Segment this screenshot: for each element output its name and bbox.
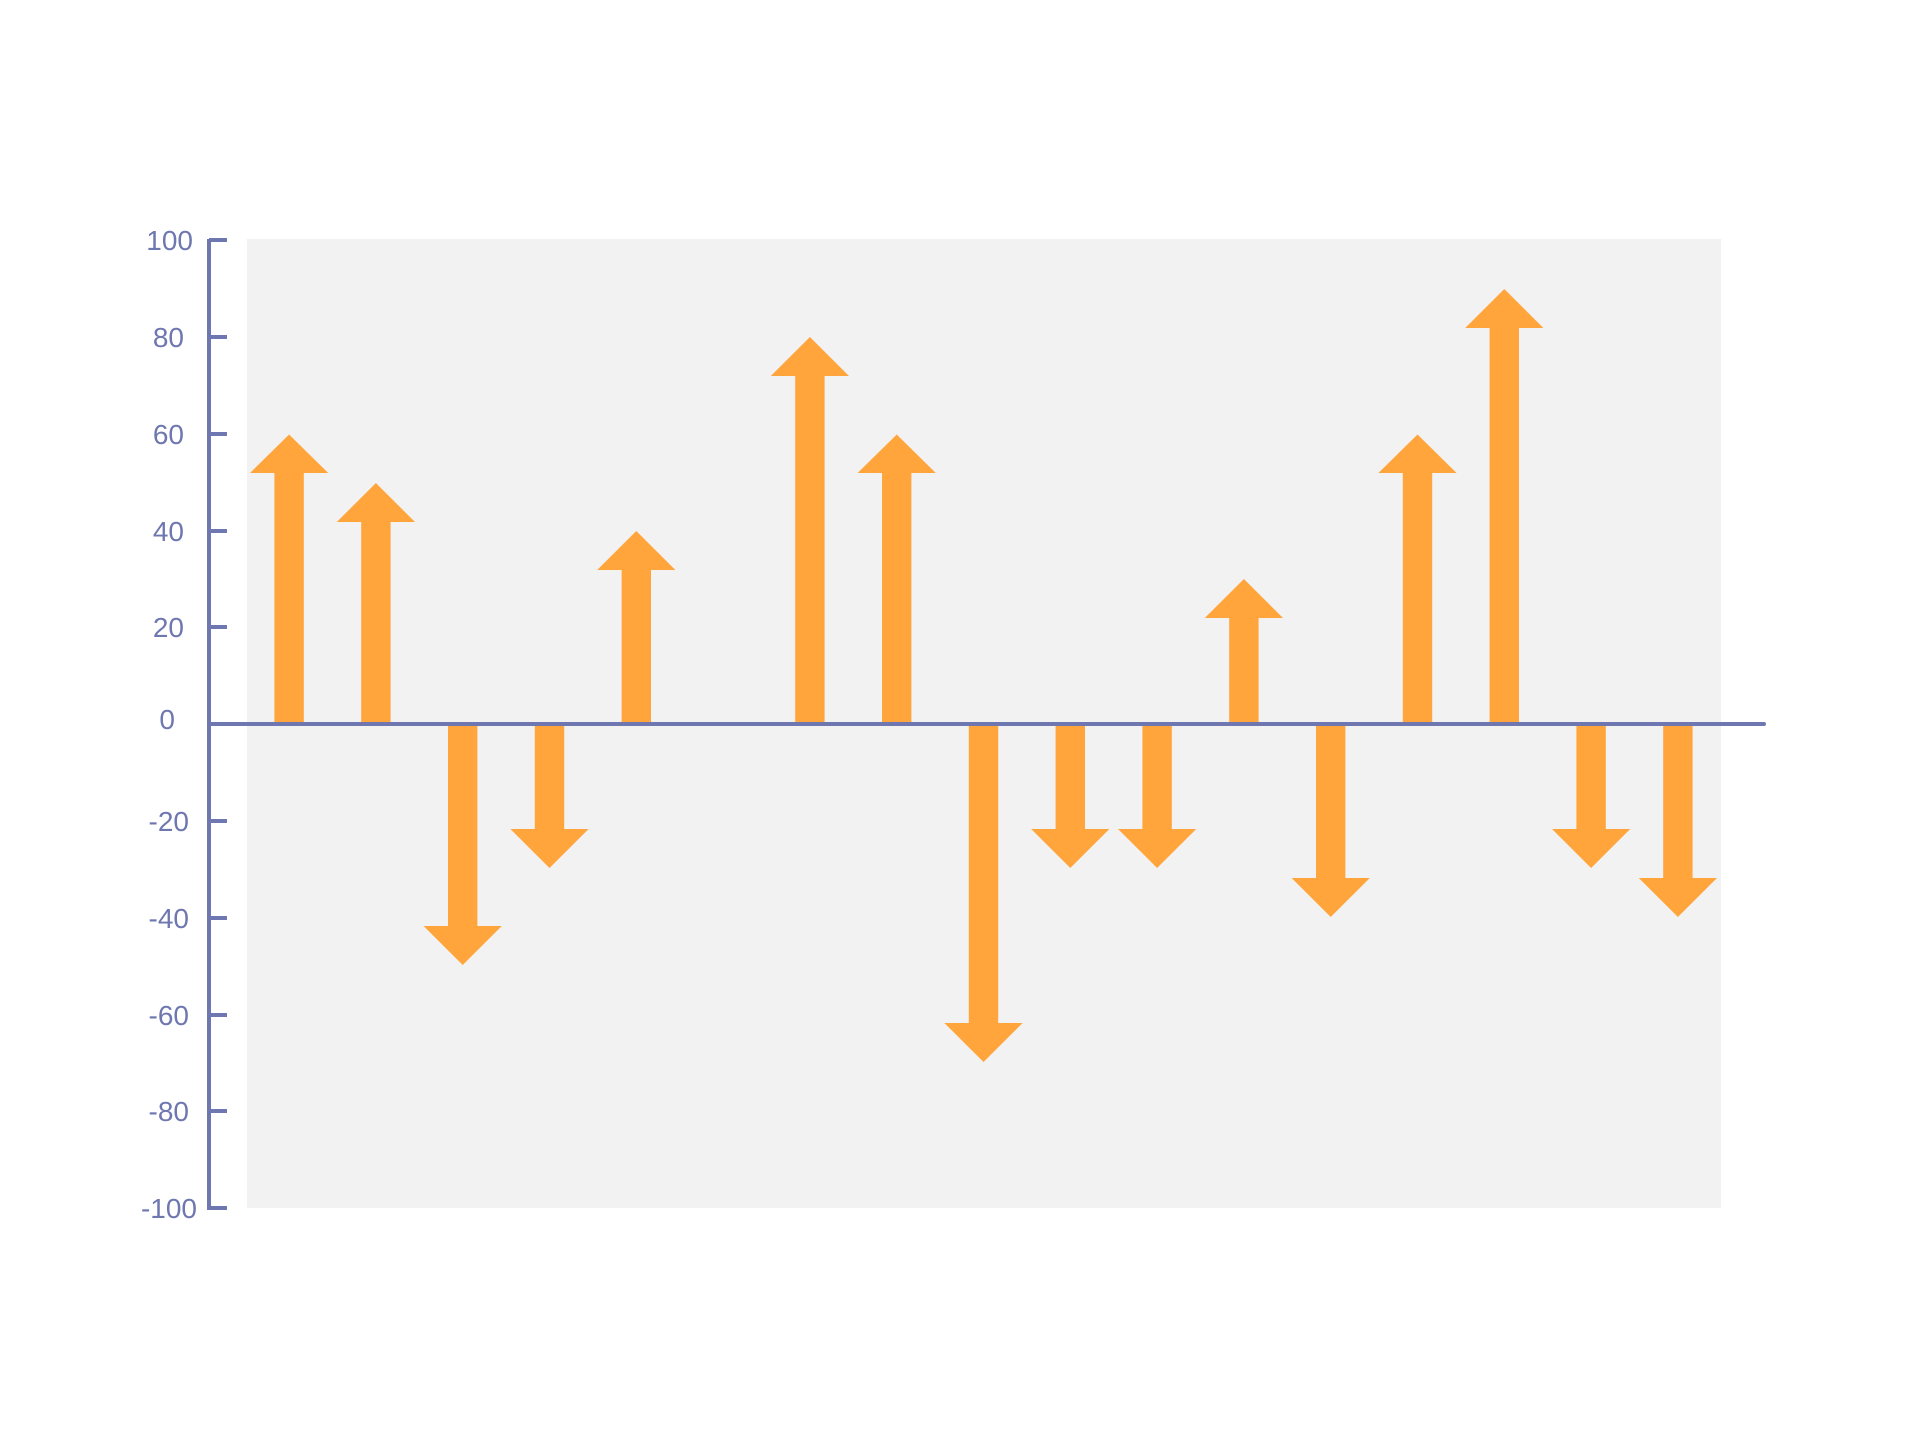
arrow 60 (250, 434, 328, 724)
arrow 60 (858, 434, 936, 724)
y axis (209, 239, 227, 1210)
y axis labels: -20 (149, 806, 189, 837)
arrow -70 (944, 724, 1023, 1062)
y axis labels: 0 (159, 704, 175, 735)
y axis labels: 80 (153, 322, 184, 353)
y axis labels: -80 (149, 1096, 189, 1127)
zero baseline (209, 722, 1764, 726)
arrow 50 (337, 483, 415, 724)
arrow -30 (1031, 724, 1109, 868)
arrow 30 (1205, 579, 1283, 724)
y axis labels: 100 (146, 225, 193, 256)
arrow -40 (1292, 724, 1370, 917)
y axis labels: -100 (141, 1193, 197, 1224)
y axis labels (141, 225, 197, 1224)
y axis labels: 20 (153, 612, 184, 643)
arrow -30 (1118, 724, 1196, 868)
y axis labels: 60 (153, 419, 184, 450)
arrow -50 (424, 724, 502, 965)
y axis labels: -40 (149, 903, 189, 934)
y axis labels: -60 (149, 1000, 189, 1031)
arrow -40 (1639, 724, 1717, 917)
arrow 60 (1378, 434, 1457, 724)
arrows (250, 289, 1717, 1062)
arrow 90 (1465, 289, 1543, 724)
chart panel background (247, 239, 1721, 1208)
arrow -30 (1552, 724, 1630, 868)
arrow -30 (510, 724, 589, 868)
arrow 80 (771, 337, 849, 724)
y axis labels: 40 (153, 516, 184, 547)
arrow 40 (597, 531, 675, 724)
